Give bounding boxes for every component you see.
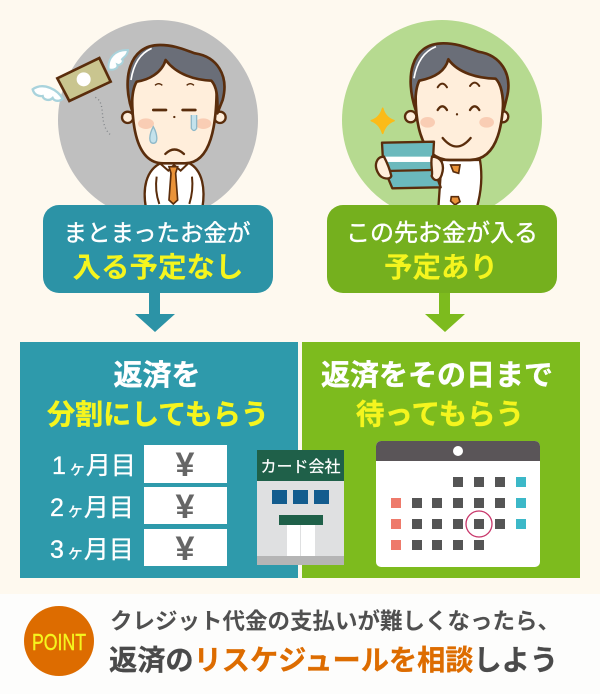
text: point message [109,608,560,676]
icon: card company building: カード会社 [260,458,341,476]
heading: postponement [321,359,553,431]
row: month 2: ¥ [176,488,195,526]
illustration: smiling man with passbook [371,43,508,208]
callout: no income: まとまったお金が [63,220,251,246]
panel: expected income scenario [327,20,557,332]
callout: no income [43,205,273,293]
row: month 1 [52,445,227,484]
grey circle backdrop [58,20,258,220]
row: month 2: 2ヶ月目 [50,494,134,522]
icon: card company building [257,450,344,565]
icon: calendar [376,441,540,567]
row: month 3: ¥ [176,530,195,568]
callout: expected income: この先お金が入る [346,220,538,247]
icon: flying banknote [33,50,128,135]
arrow: down to instalments [135,293,175,332]
heading: instalments: 返済を [113,359,201,392]
heading: instalments: 分割にしてもらう [47,399,269,430]
row: month 3: 3ヶ月目 [50,536,134,564]
row: month 1: 1ヶ月目 [52,452,136,480]
badge: point: POINT [32,629,86,655]
row: month 2 [50,487,227,526]
arrow: down to postponement [425,293,465,332]
text: point message: クレジット代金の支払いが難しくなったら、 [110,608,560,634]
callout: no income: 入る予定なし [72,252,244,284]
heading: postponement: 返済をその日まで [321,359,553,392]
badge: point [24,606,94,676]
illustration: crying man [122,45,226,208]
callout: expected income: 予定あり [384,252,498,284]
callout: expected income [327,205,557,293]
heading: instalments [47,359,269,430]
panel: point footer [0,594,600,694]
row: month 1: ¥ [176,446,195,484]
heading: postponement: 待ってもらう [356,399,524,431]
panel: no income scenario [33,20,273,332]
panel: instalment plan [20,342,298,578]
row: month 3 [50,529,227,568]
green circle backdrop [342,20,542,220]
panel: payment postponement [302,342,580,578]
text: point message: 返済のリスケジュールを相談しよう [109,644,558,676]
